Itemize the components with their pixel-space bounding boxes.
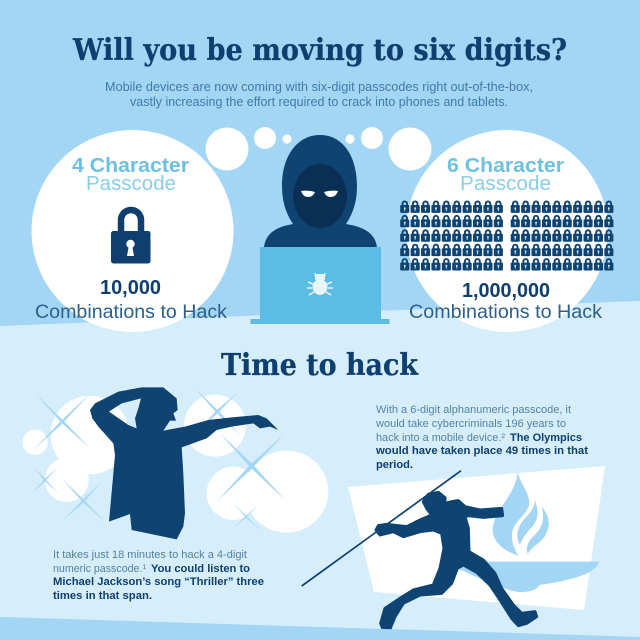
text: 4-digit passcode: Michael Jackson’s song “Thriller” three <box>53 576 264 588</box>
heading: 4 character: 4 Character <box>72 155 189 177</box>
heading: passcode: Passcode <box>86 173 176 195</box>
clouds behind dancer <box>22 395 328 533</box>
text: 6-digit passcode: With a 6-digit alphanumeric passcode, it <box>376 404 572 416</box>
text: 4-digit passcode <box>53 549 264 602</box>
subtitle: Mobile devices are now coming with six-digit passcodes right out-of-the-box, <box>105 79 533 94</box>
text: 4-digit passcode: It takes just 18 minutes to hack a 4-digit <box>53 549 248 561</box>
number: 1,000,000: 1,000,000 <box>462 280 550 302</box>
icon: padlock <box>111 210 150 264</box>
athlete silhouette <box>376 492 537 630</box>
icon: right padlock grid <box>511 201 613 270</box>
sparkles <box>32 388 285 530</box>
bottom band <box>0 617 640 640</box>
panel: 6 character passcode <box>400 130 613 332</box>
heading: 6 character: 6 Character <box>447 155 564 177</box>
title: Will you be moving to six digits? <box>72 33 567 68</box>
icon: flame bowl <box>457 562 599 592</box>
text: 6-digit passcode: would have taken place 49 times in that <box>375 445 588 457</box>
label: combinations: Combinations to Hack <box>409 301 602 323</box>
olympics illustration <box>302 466 605 630</box>
dancer silhouette <box>90 387 278 539</box>
javelin <box>302 471 461 586</box>
icon: bug <box>307 273 333 295</box>
text: 6-digit passcode: would take cybercriminals 196 years to <box>375 418 566 430</box>
heading: passcode: Passcode <box>460 173 551 195</box>
thought bubbles <box>206 127 432 170</box>
white backdrop <box>348 466 605 610</box>
subtitle <box>105 79 533 109</box>
icon: olympic flame <box>493 472 549 556</box>
lower light panel <box>0 301 640 637</box>
heading: time to hack: Time to hack <box>221 348 419 383</box>
number: 10,000: 10,000 <box>100 277 161 299</box>
laptop <box>250 247 390 324</box>
text: 4-digit passcode: You could listen to <box>151 563 250 575</box>
icon: left padlock grid <box>400 201 503 270</box>
hacker figure <box>264 135 377 247</box>
text: 6-digit passcode <box>375 404 588 471</box>
panel: 4 character passcode <box>32 130 234 332</box>
text: 6-digit passcode: hack into a mobile device.² <box>376 432 505 444</box>
text: 6-digit passcode: period. <box>376 459 413 471</box>
label: combinations: Combinations to Hack <box>35 301 227 323</box>
subtitle: vastly increasing the effort required to crack into phones and tablets. <box>130 94 508 109</box>
text: 4-digit passcode: numeric passcode.¹ <box>53 563 146 575</box>
text: 6-digit passcode: The Olympics <box>510 432 582 444</box>
text: 4-digit passcode: times in that span. <box>53 590 152 602</box>
